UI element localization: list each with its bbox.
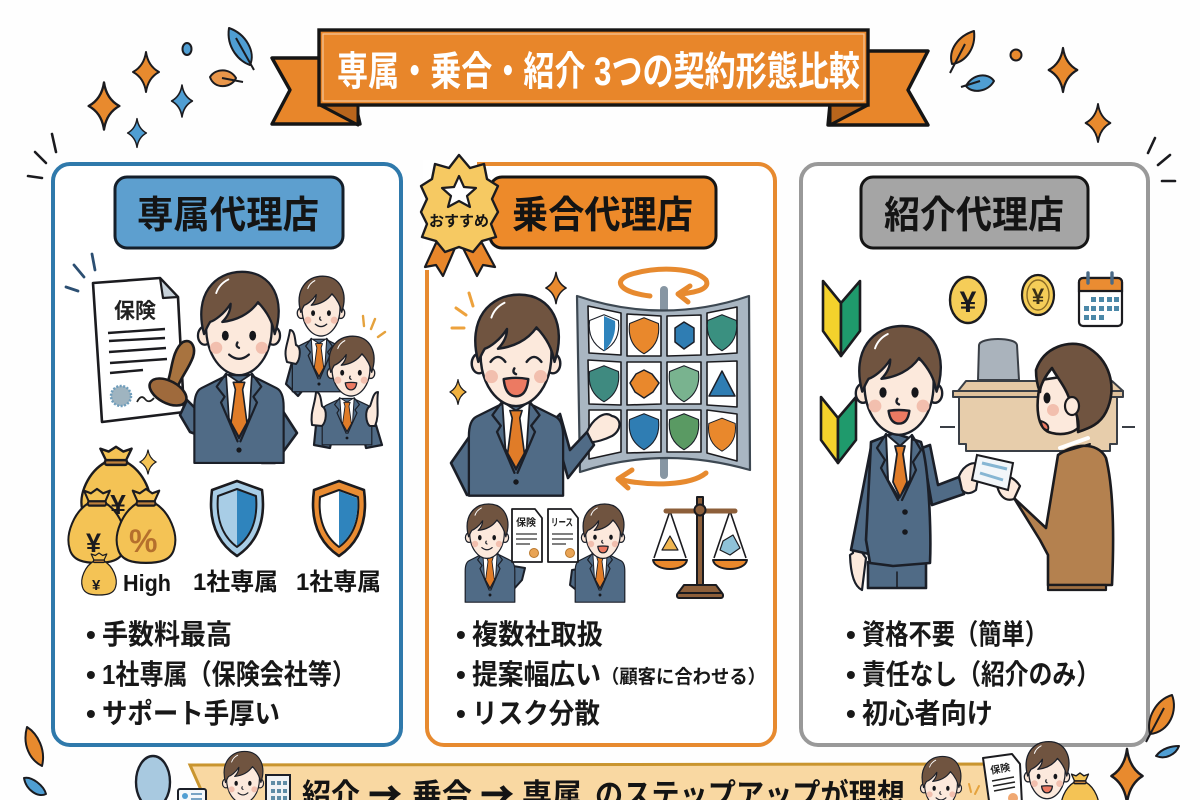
arrow: top rotation [620, 269, 707, 302]
icon: yen coin: ¥ [960, 286, 977, 319]
icon: banner document: 保険 [989, 761, 1011, 777]
panel: 専属代理店 [53, 164, 401, 745]
bullet list: 資格不要（簡単） [862, 619, 1048, 650]
heading: 専属代理店: 専属代理店 [137, 195, 319, 237]
icon: yen coin small [1022, 275, 1054, 315]
bullet list: 手数料最高 [102, 619, 232, 650]
bullet list [456, 619, 766, 729]
icon: building [266, 775, 290, 800]
badge: おすすめ [421, 155, 498, 276]
bullet list: 責任なし（紹介のみ） [862, 659, 1100, 690]
heading: 紹介代理店: 紹介代理店 [884, 195, 1064, 237]
bullet list: リスク分散 [472, 698, 600, 729]
icon: yen coin [950, 277, 986, 323]
icon: stamp [145, 341, 194, 411]
icon: beginner mark 2 [821, 397, 856, 463]
figure: agent with 保険 document: 保険 [516, 516, 536, 529]
icon: blue shield [211, 481, 263, 556]
figure: agent with リース document: リース [551, 517, 573, 529]
icon: beginner mark 1 [823, 281, 860, 356]
bullet list: 提案幅広い [472, 659, 601, 690]
figure: client in brown jacket [996, 344, 1113, 590]
label: 1社専属: 1社専属 [296, 569, 381, 596]
rays [363, 316, 385, 337]
label: High: High [123, 570, 171, 596]
icon: id card [178, 789, 206, 800]
icon: money bags: ¥ [110, 489, 126, 520]
bullet list: 1社専属（保険会社等） [102, 659, 356, 690]
panel: 紹介代理店 [801, 164, 1148, 745]
panel: 乗合代理店 [421, 155, 775, 745]
figure: colleague with thumb up [285, 276, 346, 396]
bullet list: • [846, 619, 856, 650]
heading: 乗合代理店: 乗合代理店 [512, 195, 693, 237]
label: 1社専属: 1社専属 [193, 569, 278, 596]
bullet list [846, 619, 1100, 729]
icon: banner money bag [1061, 773, 1099, 800]
title ribbon [272, 30, 928, 125]
icon: magnifier [136, 756, 170, 800]
icon: money bags: ¥ [86, 528, 101, 558]
badge: おすすめ: おすすめ [429, 213, 489, 230]
bullet list: （顧客に合わせる） [601, 666, 766, 688]
decoration: bottom left leaf and dot [24, 727, 46, 795]
icon: money bags [68, 447, 175, 595]
icon: contract document: 保険 [114, 300, 156, 323]
icon: business card [972, 455, 1013, 490]
icon: balance scale [653, 497, 747, 598]
bullet list: • [86, 698, 96, 729]
decoration: top right sparkles and leaves [950, 31, 1110, 142]
heading: 乗合代理店 [490, 177, 716, 248]
icon: desk and chair [940, 339, 1135, 451]
bullet list [86, 619, 356, 729]
bullet list: • [86, 659, 96, 690]
decoration: bottom right leaf and sparkle [1111, 695, 1179, 800]
icon: money bags: % [129, 523, 157, 559]
figure: banner person right 2 [1024, 742, 1070, 799]
figure: banner person right 1 [920, 756, 962, 800]
rays [969, 784, 979, 794]
bullet list: 初心者向け [862, 698, 993, 729]
figure: banner person left [222, 751, 264, 800]
icon: rotating board with shields [577, 290, 750, 475]
icon: contract document [93, 278, 184, 422]
decoration: top left rays [28, 134, 56, 178]
arrow: bottom rotation [618, 470, 706, 488]
bullet list: サポート手厚い [102, 698, 280, 729]
figure: agent with リース document [548, 504, 625, 602]
bullet list: 複数社取扱 [472, 619, 603, 650]
bullet list: • [456, 619, 466, 650]
icon: calendar [1079, 273, 1122, 326]
icon: money bags: ¥ [92, 577, 101, 594]
sparkles and rays [450, 272, 566, 404]
figure: main agent handing card [850, 433, 980, 590]
bullet list: • [846, 659, 856, 690]
figure: agent with 保険 document [465, 504, 542, 602]
bullet list: • [456, 698, 466, 729]
recommended badge background cover [423, 160, 477, 270]
icon: yen coin small: ¥ [1032, 284, 1045, 309]
banner: step-up message [190, 764, 1007, 800]
decoration: top right rays [1148, 138, 1175, 181]
icon: banner document [983, 754, 1022, 800]
heading: 紹介代理店 [861, 177, 1088, 248]
icon: orange shield [313, 481, 365, 556]
bullet list: • [456, 659, 466, 690]
heading: 専属代理店 [115, 177, 343, 248]
rays [66, 254, 95, 291]
figure: main agent with stamp [180, 272, 297, 463]
bullet list: • [86, 619, 96, 650]
decoration: top left sparkles and leaves [89, 28, 254, 147]
title text: 専属・乗合・紹介 3つの契約形態比較 [337, 50, 860, 94]
figure: junior agent with thumbs up [312, 336, 382, 448]
figure: main agent presenting [451, 295, 620, 496]
head: main agent [856, 326, 942, 435]
bullet list: • [846, 698, 856, 729]
